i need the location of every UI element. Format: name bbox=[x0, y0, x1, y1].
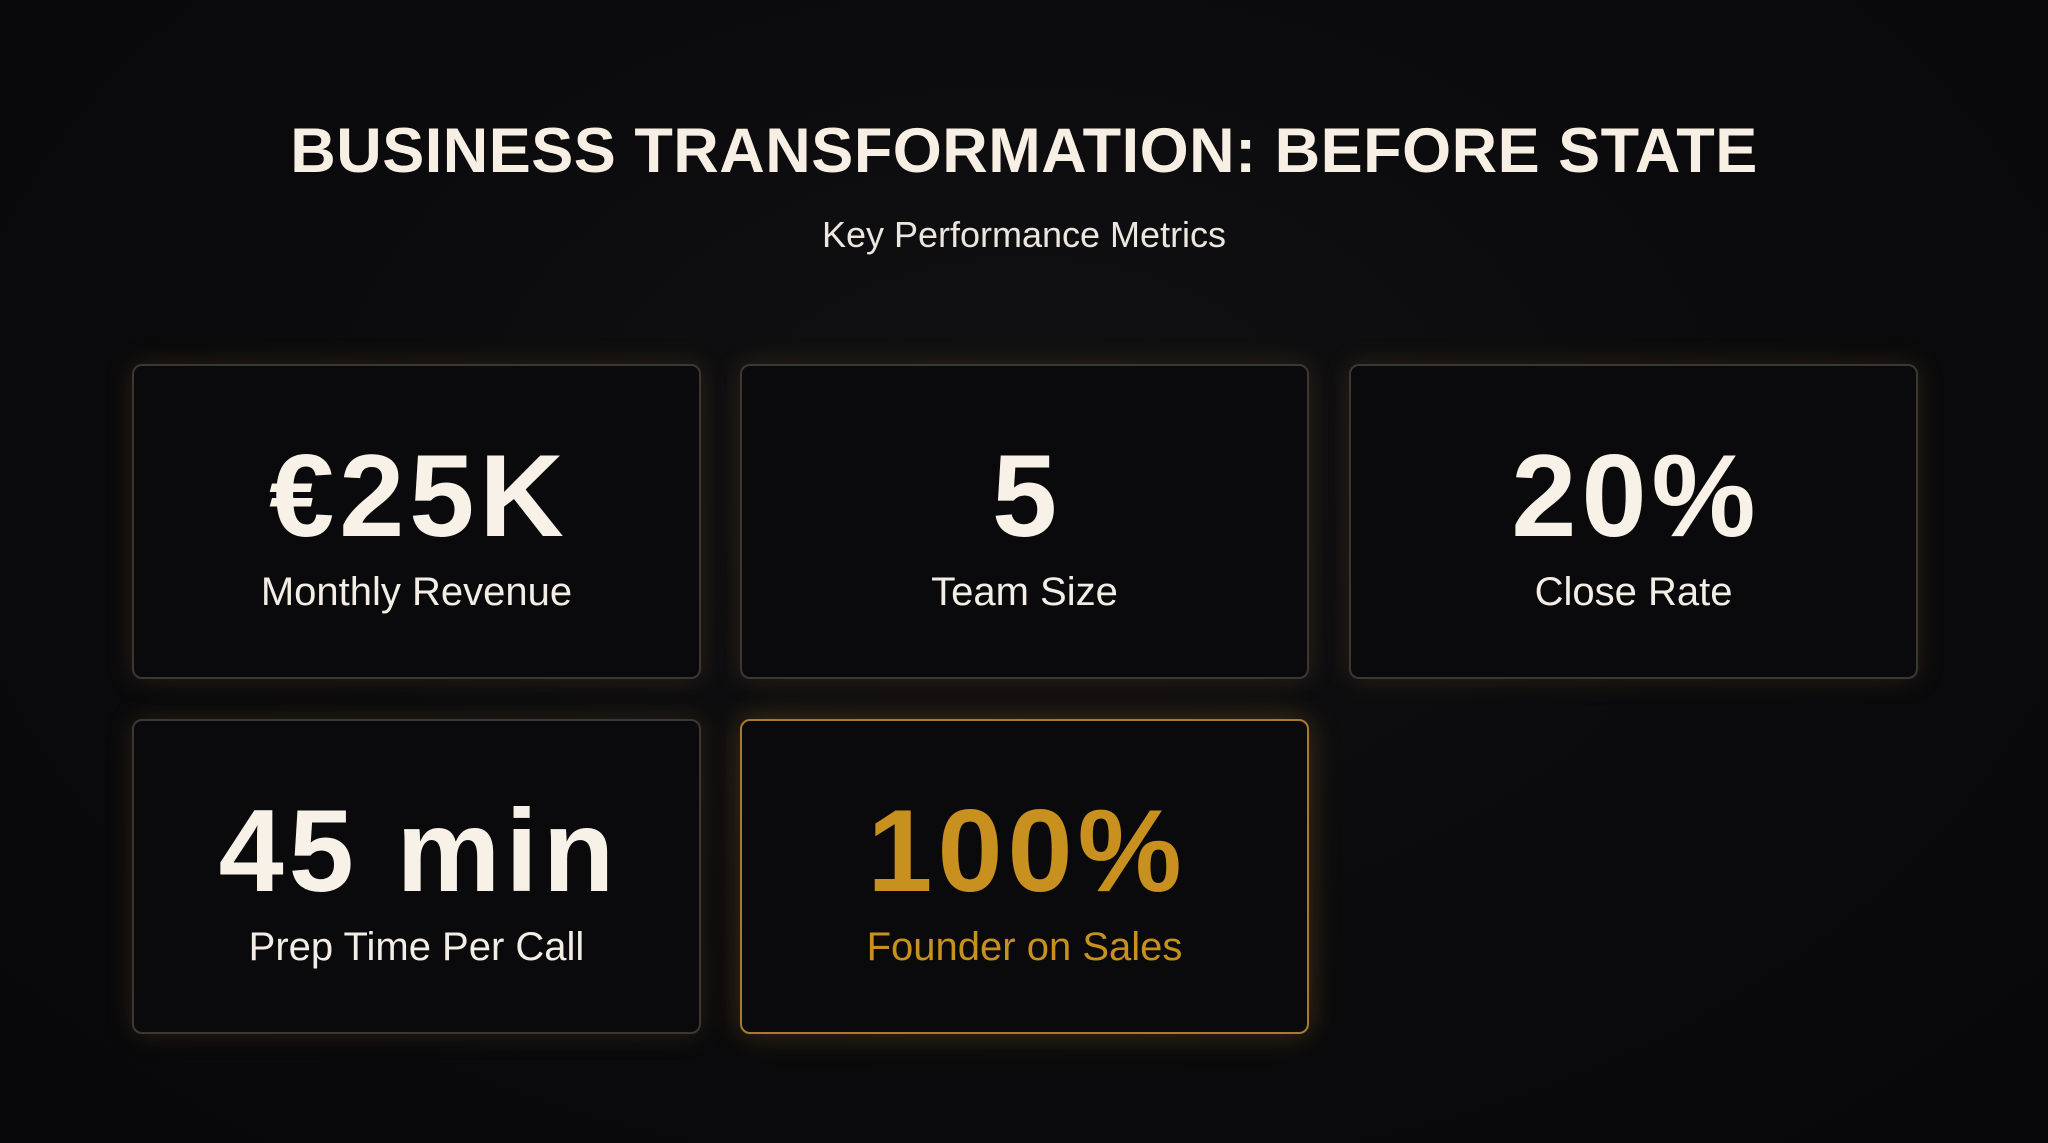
metric label: Close Rate bbox=[1535, 570, 1732, 614]
title: BUSINESS TRANSFORMATION: BEFORE STATE bbox=[290, 116, 1758, 186]
metric label: Prep Time Per Call bbox=[249, 925, 584, 969]
panel: founder on sales (highlighted) bbox=[740, 719, 1309, 1034]
metric value: €25K bbox=[269, 430, 569, 561]
panel: prep time bbox=[132, 719, 701, 1034]
metric value: 45 min bbox=[219, 785, 619, 916]
subtitle: Key Performance Metrics bbox=[822, 214, 1226, 255]
metric value: 20% bbox=[1511, 430, 1761, 561]
metric value: 5 bbox=[992, 430, 1062, 561]
panel: team size bbox=[740, 364, 1309, 679]
metric label: Founder on Sales bbox=[867, 925, 1182, 969]
metric value: 100% bbox=[867, 785, 1187, 916]
panel: monthly revenue bbox=[132, 364, 701, 679]
metric label: Team Size bbox=[931, 570, 1118, 614]
panel: close rate bbox=[1349, 364, 1918, 679]
metric label: Monthly Revenue bbox=[261, 570, 572, 614]
